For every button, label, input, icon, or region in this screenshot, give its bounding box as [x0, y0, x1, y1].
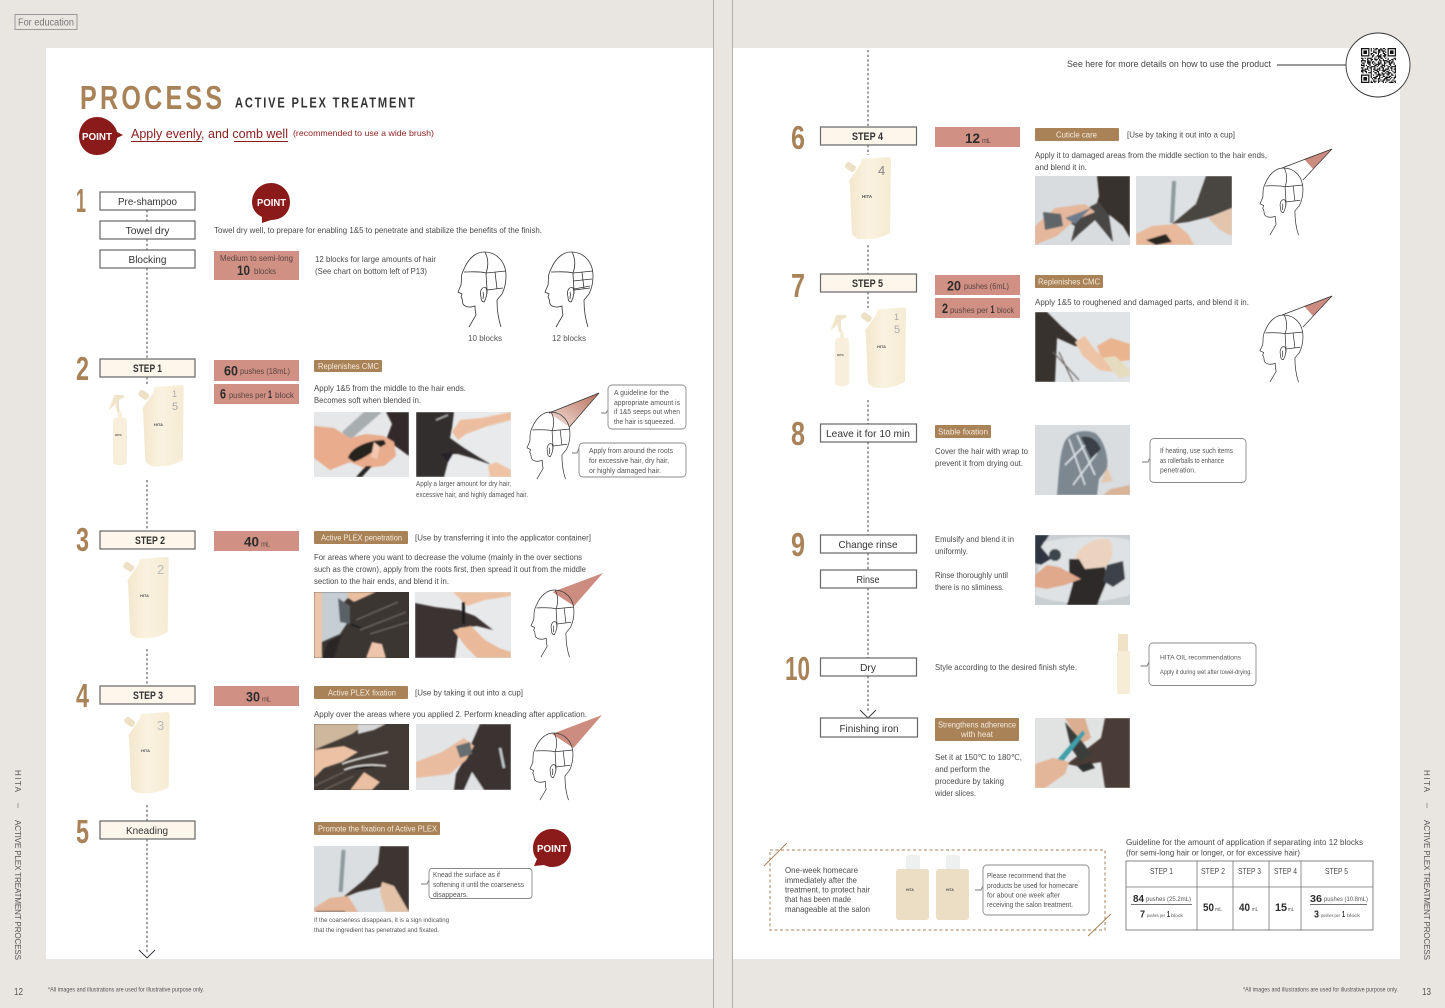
tag: replenishes cmc: Replenishes CMC — [318, 362, 379, 371]
table: 12-block guideline: pushes (25.2mL) — [1146, 897, 1191, 903]
tag: active plex penetration — [314, 531, 408, 544]
step number 1: 1 — [76, 182, 86, 219]
photo: hands on wet hair — [416, 724, 511, 790]
panel: step 3 — [76, 677, 602, 800]
instructions: and blend it in. — [1035, 162, 1087, 172]
table: 12-block guideline: 15 — [1275, 902, 1287, 914]
caption: Apply a larger amount for dry hair, — [416, 481, 511, 488]
homecare text: One-week homecare — [785, 865, 858, 875]
step number 8: 8 — [791, 415, 805, 452]
instructions — [934, 752, 1022, 798]
dashed frame — [764, 843, 1111, 936]
box: step 1: STEP 1 — [133, 363, 162, 375]
callout: apply from roots — [572, 443, 686, 477]
amount: 2 pushes per block: 1 — [990, 304, 994, 316]
callout: knead the surface: softening it until the coarseness — [433, 882, 524, 889]
product: spray and pouch — [108, 385, 184, 466]
product: homecare pouches: HITA — [906, 888, 914, 892]
tag: replenishes cmc — [1035, 275, 1103, 288]
tag: replenishes cmc: Replenishes CMC — [1038, 278, 1100, 286]
callout: recommend — [975, 865, 1089, 915]
side label: right: HITA — [1422, 770, 1431, 793]
amount: 40 ml: 40 — [244, 534, 259, 550]
step number 2: 2 — [76, 350, 89, 387]
title — [80, 80, 415, 117]
box: change rinse: Change rinse — [838, 539, 898, 551]
photo: flat iron on hair — [1035, 718, 1130, 788]
amount: 40 ml: mL — [261, 542, 270, 548]
product: spray and pouch: HITA — [115, 433, 123, 437]
product: spray and pouch: 5 — [172, 401, 178, 413]
instructions: Apply over the areas where you applied 2. Perform kneading after application. — [314, 709, 587, 719]
callout: heating: as rollerballs to enhance — [1160, 458, 1224, 465]
head diagram: hair ends — [1260, 149, 1332, 235]
callout: guideline: A guideline for the — [614, 390, 669, 397]
side label: right: ACTIVE PLEX TREATMENT PROCESS — [1422, 820, 1431, 960]
table: 12-block guideline: STEP 4 — [1274, 866, 1297, 876]
panel: step 5 — [791, 267, 1332, 388]
table: 12-block guideline: pushes per — [1321, 913, 1340, 918]
tag: promote fixation — [314, 822, 440, 835]
qr link: See here for more details on how to use the product — [1067, 59, 1271, 69]
step number 4: 4 — [76, 677, 89, 714]
step number 9: 9 — [791, 526, 805, 563]
box: blocking — [100, 250, 195, 268]
box: step 3 — [100, 686, 195, 704]
table: 12-block guideline: mL — [1215, 907, 1222, 913]
amount: 20 pushes: 20 — [947, 278, 961, 294]
instructions: and perform the — [935, 764, 990, 774]
tag: active plex penetration: Active PLEX penetration — [321, 534, 402, 542]
flow line: left page — [139, 210, 155, 958]
box: step 2: STEP 2 — [135, 535, 165, 547]
instructions — [1035, 150, 1267, 172]
step number 5: 5 — [76, 813, 89, 850]
instructions: Apply it to damaged areas from the middle section to the hair ends, — [1035, 150, 1267, 160]
photo: rinsing at the basin — [1035, 535, 1130, 605]
panel: step number 1 pre-treatment — [76, 182, 593, 343]
instructions: such as the crown), apply from the roots first, then spread it out from the middle — [314, 564, 586, 574]
amount: blocks: blocks — [254, 267, 276, 276]
callout: knead the surface: disappears. — [433, 892, 468, 899]
table: 12-block guideline: 1 — [1167, 910, 1170, 919]
amount: 2 pushes per block: pushes per — [950, 306, 988, 315]
homecare text: that has been made — [785, 894, 851, 904]
product: spray and pouch: HITA — [837, 353, 845, 357]
callout: guideline: appropriate amount is — [614, 400, 680, 407]
tag: active plex fixation: Active PLEX fixation — [328, 688, 396, 698]
callout: recommend: Please recommend that the — [987, 873, 1066, 880]
step number 7: 7 — [791, 267, 805, 304]
box: pre-shampoo: Pre-shampoo — [118, 196, 177, 208]
caption — [416, 481, 528, 499]
homecare text: immediately after the — [785, 875, 857, 885]
caption: If the coarseness disappears, it is a sign indicating — [314, 917, 449, 924]
callout: recommend: receiving the salon treatment. — [987, 902, 1073, 909]
product: spray and pouch: HITA — [154, 422, 163, 427]
amount: 6 pushes per block: 1 — [268, 389, 272, 401]
amount: 60 pushes — [214, 360, 299, 381]
callout: heating: If heating, use such items — [1160, 448, 1233, 455]
callout: guideline: if 1&5 seeps out when — [614, 409, 680, 416]
homecare text — [785, 865, 870, 914]
box: step 1 — [100, 359, 195, 377]
box: step 2 — [100, 531, 195, 549]
main point callout: POINT — [82, 131, 113, 143]
amount: 20 pushes: pushes (6mL) — [964, 282, 1009, 291]
box: step 4 — [820, 127, 916, 145]
table: 12-block guideline: 84 — [1133, 894, 1144, 905]
instructions: there is no sliminess. — [935, 582, 1004, 592]
usage note: [Use by taking it out into a cup] — [1127, 130, 1235, 140]
tag: active plex fixation — [314, 686, 408, 699]
amount: 2 pushes per block: block — [997, 306, 1015, 315]
table: 12-block guideline: mL — [1288, 907, 1294, 913]
table: 12-block guideline: 7 — [1140, 910, 1145, 920]
head diagram: 12 blocks: 12 blocks — [552, 334, 586, 343]
product: spray and pouch: 5 — [894, 324, 900, 336]
tag: strengthens adherence: Strengthens adherence — [938, 720, 1017, 730]
amount: 6 pushes per block: 6 — [220, 386, 226, 402]
footnote: right: *All images and illustrations are used for illustrative purpose only. — [1243, 988, 1398, 994]
panel: leave it for 10 min — [791, 415, 1246, 495]
photo: applicator on hair — [314, 592, 409, 658]
side label: left: ACTIVE PLEX TREATMENT PROCESS — [13, 820, 22, 960]
amount: 60 pushes: 60 — [224, 364, 238, 378]
instructions: Cover the hair with wrap to — [935, 446, 1028, 456]
instructions — [314, 552, 586, 586]
callout: hita oil: Apply it during wet after towel-drying. — [1160, 670, 1252, 676]
side label: left: HITA — [13, 770, 22, 793]
callout: recommend: products be used for homecare — [987, 883, 1078, 890]
amount: 30 ml: 30 — [246, 688, 260, 704]
box: leave it for 10 min — [820, 424, 916, 442]
box: towel dry — [100, 221, 195, 239]
panel: one-week homecare — [764, 843, 1111, 936]
callout: apply from roots: for excessive hair, dry hair, — [589, 458, 669, 465]
photo: blending through hair — [1035, 312, 1130, 382]
instructions: Apply 1&5 from the middle to the hair ends. — [314, 383, 466, 393]
head diagram: damaged parts — [1260, 296, 1332, 382]
page number 13: 13 — [1422, 987, 1431, 998]
head diagram: over sections — [530, 715, 602, 800]
box: step 5: STEP 5 — [852, 278, 883, 290]
table: 12-block guideline: STEP 5 — [1325, 866, 1348, 876]
product: spray and pouch — [830, 307, 906, 388]
amount: 30 ml — [214, 686, 299, 706]
table: 12-block guideline: STEP 2 — [1201, 866, 1225, 876]
table: 12-block guideline: STEP 1 — [1150, 866, 1173, 876]
photo: combing hair in hands — [314, 412, 409, 477]
head diagram: roots to ends — [531, 573, 603, 657]
instructions: prevent it from drying out. — [935, 458, 1023, 468]
table: 12-block guideline: 40 — [1239, 902, 1250, 914]
panel: step 1 — [76, 350, 686, 499]
blocks note: (See chart on bottom left of P13) — [315, 266, 427, 276]
callout: heating — [1142, 438, 1246, 482]
head diagram: middle to ends — [527, 393, 599, 479]
instructions: wider slices. — [934, 788, 976, 798]
panel: finishing iron — [820, 718, 1130, 798]
instructions — [314, 383, 466, 405]
step number 6: 6 — [791, 119, 805, 156]
homecare text: treatment, to protect hair — [785, 884, 870, 894]
guideline heading: (for semi-long hair or longer, or for excessive hair) — [1126, 848, 1300, 858]
amount: 30 ml: mL — [262, 696, 271, 704]
photo: wrapped hair — [1035, 425, 1130, 495]
blocks note — [315, 254, 436, 276]
title: PROCESS — [80, 80, 222, 117]
amount: 2 pushes per block: 2 — [942, 301, 948, 316]
point badge — [252, 183, 290, 223]
towel dry note: Towel dry well, to prepare for enabling 1&5 to penetrate and stabilize the benefits of the finish. — [214, 225, 542, 235]
table: 12-block guideline: 3 — [1314, 910, 1319, 920]
blocks note: 12 blocks for large amounts of hair — [315, 254, 436, 264]
box: kneading: Kneading — [126, 825, 168, 837]
tag: stable fixation — [935, 425, 991, 438]
amount: 2 pushes per block — [935, 298, 1020, 318]
table: 12-block guideline: block — [1171, 913, 1184, 918]
amount: 6 pushes per block: pushes per — [229, 391, 266, 400]
panel: kneading — [76, 813, 571, 934]
label: for education — [15, 14, 77, 30]
box: dry — [820, 658, 916, 676]
callout: hita oil: HITA OIL recommendations — [1160, 654, 1242, 662]
amount: 6 pushes per block: block — [275, 391, 295, 400]
photo: comb and hair strand — [1136, 176, 1232, 245]
amount: 12 ml — [935, 127, 1020, 147]
instructions: Becomes soft when blended in. — [314, 395, 421, 405]
usage note: [Use by transferring it into the applicator container] — [415, 532, 591, 542]
caption: that the ingredient has penetrated and fixated. — [314, 927, 439, 934]
box: change rinse — [820, 535, 916, 553]
table: 12-block guideline: block — [1347, 913, 1361, 918]
main point callout — [79, 117, 434, 155]
tag: cuticle care: Cuticle care — [1056, 130, 1098, 140]
box: towel dry: Towel dry — [126, 225, 170, 237]
box: dry: Dry — [860, 662, 877, 674]
label: for education: For education — [18, 18, 74, 28]
table: 12-block guideline — [1126, 861, 1373, 930]
photo: sectioning hair — [415, 592, 511, 658]
box: step 4: STEP 4 — [852, 131, 884, 143]
product: pouch 4 — [844, 157, 891, 239]
amount: 60 pushes: pushes (18mL) — [240, 367, 290, 376]
table: 12-block guideline: 50 — [1203, 902, 1214, 914]
box: blocking: Blocking — [128, 254, 167, 266]
callout: heating: penetration. — [1160, 468, 1196, 474]
instructions: Rinse thoroughly until — [935, 570, 1008, 580]
photo: kneading with comb — [314, 846, 409, 912]
product: pouch 4: 4 — [878, 163, 885, 178]
main point callout: (recommended to use a wide brush) — [293, 128, 434, 138]
table: 12-block guideline: 36 — [1310, 894, 1322, 905]
box: finishing iron — [820, 718, 918, 737]
photo: brushing hair ends — [1035, 176, 1130, 245]
amount: blocks — [214, 251, 299, 280]
instructions: Emulsify and blend it in — [935, 534, 1014, 544]
point badge: POINT — [257, 197, 287, 209]
box: step 5 — [820, 274, 916, 292]
panel: dry — [785, 634, 1256, 694]
table: 12-block guideline: STEP 3 — [1238, 866, 1261, 876]
box: kneading — [100, 821, 195, 839]
callout: hita oil — [1140, 643, 1256, 686]
head diagram: 12 blocks — [545, 252, 593, 343]
box: finishing iron: Finishing iron — [840, 723, 899, 735]
table: 12-block guideline: pushes per — [1147, 913, 1165, 918]
step number 3: 3 — [76, 521, 89, 558]
head diagram: 10 blocks — [458, 252, 506, 343]
product: homecare pouches — [896, 855, 969, 920]
point badge: POINT — [537, 843, 568, 855]
product: pouch 3: HITA — [141, 748, 150, 753]
product: spray and pouch: HITA — [877, 344, 886, 349]
caption: excessive hair, and highly damaged hair. — [416, 492, 528, 499]
callout: knead the surface — [421, 868, 532, 899]
guideline heading — [1126, 837, 1363, 858]
instructions — [935, 446, 1028, 468]
amount: 40 ml — [214, 531, 299, 551]
table: 12-block guideline: pushes (10.8mL) — [1324, 897, 1368, 903]
callout: apply from roots: or highly damaged hair. — [589, 468, 661, 475]
product: pouch 3 — [123, 712, 170, 793]
tag: cuticle care — [1035, 128, 1119, 141]
caption — [314, 917, 449, 934]
table: 12-block guideline: mL — [1252, 907, 1258, 913]
instructions: Set it at 150℃ to 180℃, — [935, 752, 1022, 762]
instructions — [935, 534, 1014, 592]
panel: step 4 — [791, 119, 1332, 245]
amount: blocks: 10 — [237, 263, 250, 278]
qr link — [1067, 33, 1410, 97]
product: pouch 3: 3 — [157, 718, 164, 733]
product: pouch 2: 2 — [157, 562, 164, 577]
usage note: [Use by taking it out into a cup] — [415, 688, 523, 698]
box: rinse: Rinse — [856, 574, 880, 586]
instructions: Apply 1&5 to roughened and damaged parts, and blend it in. — [1035, 297, 1249, 307]
tag: strengthens adherence — [935, 718, 1019, 741]
tag: stable fixation: Stable fixation — [938, 428, 988, 436]
amount: blocks: Medium to semi-long — [220, 254, 293, 263]
table: 12-block guideline: 1 — [1342, 910, 1345, 919]
box: rinse — [820, 570, 916, 588]
amount: 12 ml: 12 — [965, 130, 980, 146]
instructions: For areas where you want to decrease the volume (mainly in the over sections — [314, 552, 582, 562]
product: pouch 2 — [122, 557, 169, 638]
panel: left page — [46, 48, 713, 959]
photo: fingers in hair — [314, 724, 409, 790]
box: pre-shampoo — [100, 192, 195, 210]
page number 12: 12 — [14, 987, 23, 998]
amount: 6 pushes per block — [214, 384, 299, 404]
main point callout: Apply evenly, and comb well — [131, 126, 288, 141]
product: spray and pouch: 1 — [894, 312, 899, 322]
panel: step 2 — [76, 521, 603, 658]
flow line: right page — [860, 50, 876, 718]
step number 10: 10 — [785, 650, 810, 687]
panel: right page — [733, 48, 1400, 959]
photo: holding hair strand — [416, 412, 511, 477]
amount: 20 pushes — [935, 275, 1020, 295]
tag: strengthens adherence: with heat — [960, 730, 994, 739]
product: pouch 4: HITA — [862, 194, 873, 199]
callout: recommend: for about one week after — [987, 892, 1061, 900]
amount: 12 ml: mL — [982, 138, 991, 145]
product: spray and pouch: 1 — [172, 389, 177, 399]
callout: guideline: the hair is squeezed. — [614, 419, 675, 426]
instructions: section to the hair ends, and blend it in. — [314, 576, 449, 586]
footnote: left: *All images and illustrations are used for illustrative purpose only. — [48, 988, 204, 994]
homecare text: manageable at the salon — [785, 904, 870, 914]
instructions: uniformly. — [935, 546, 968, 556]
product: pouch 2: HITA — [140, 593, 149, 598]
head diagram: 10 blocks: 10 blocks — [468, 334, 502, 343]
guideline heading: Guideline for the amount of application if separating into 12 blocks — [1126, 837, 1363, 847]
callout: guideline — [601, 385, 686, 429]
callout: apply from roots: Apply from around the roots — [589, 448, 673, 455]
point badge — [533, 829, 571, 867]
box: step 3: STEP 3 — [133, 690, 163, 702]
title: ACTIVE PLEX TREATMENT — [235, 94, 415, 111]
callout: knead the surface: Knead the surface as if — [433, 872, 500, 879]
product: hita oil — [1117, 634, 1130, 694]
panel: rinse — [791, 526, 1130, 605]
instructions: procedure by taking — [935, 776, 1004, 786]
product: homecare pouches: HITA — [946, 888, 954, 892]
instructions: Style according to the desired finish style. — [935, 662, 1077, 672]
tag: promote fixation: Promote the fixation of Active PLEX — [318, 824, 438, 834]
box: leave it for 10 min: Leave it for 10 min — [826, 428, 910, 440]
